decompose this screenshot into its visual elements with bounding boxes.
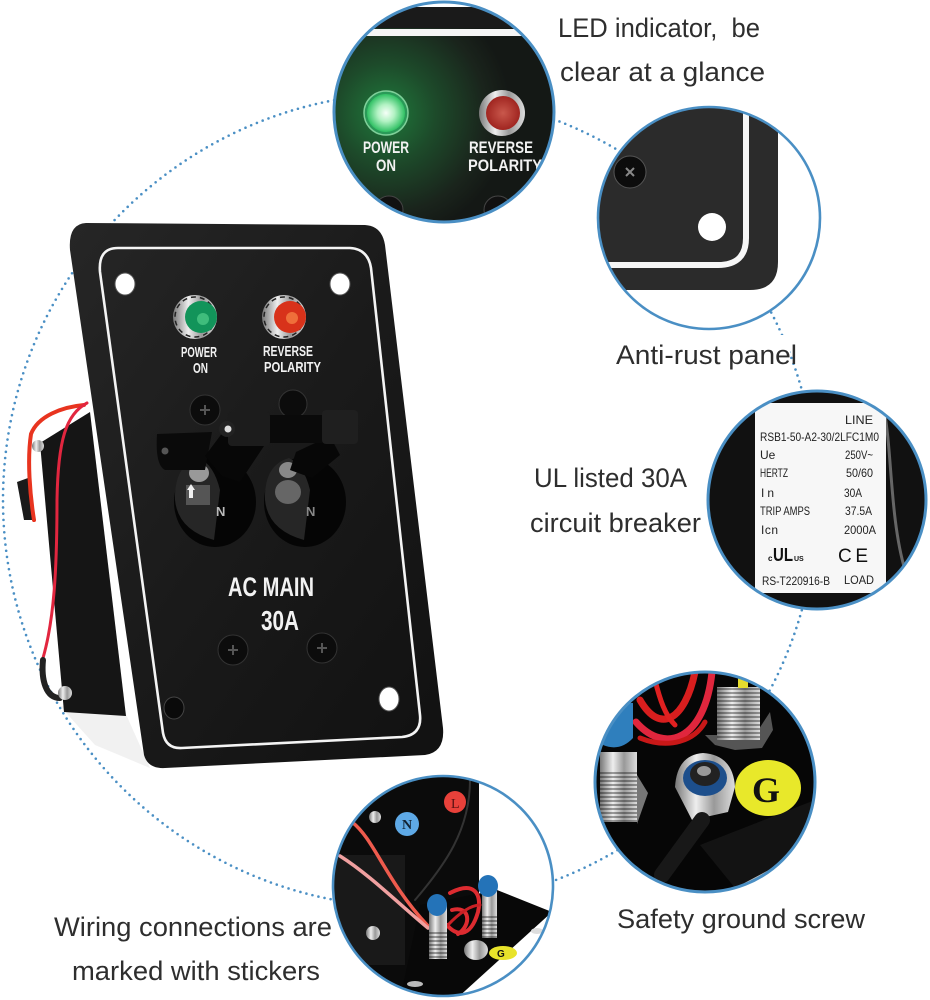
REVERSE POLARITY label: REVERSE [263, 343, 313, 360]
lower screws [380, 196, 404, 212]
breaker switch right [264, 457, 346, 547]
rating text: Icn [761, 523, 778, 537]
dotted ring connecting the callouts [3, 93, 817, 907]
rating text: 50/60 [846, 466, 873, 480]
board edge highlight [742, 870, 768, 884]
label: LED indicator [558, 13, 765, 87]
white inlay border [100, 248, 420, 748]
board [427, 890, 549, 995]
N sticker [395, 812, 419, 836]
breaker switch right: N [306, 504, 315, 519]
ground nut [675, 753, 735, 820]
label: wiring connections: Wiring connections are [54, 912, 332, 942]
label: safety ground screw: Safety ground screw [617, 904, 866, 934]
REVERSE POLARITY label [263, 343, 321, 376]
label: anti-rust panel: Anti-rust panel [616, 340, 797, 370]
panel plate [70, 223, 443, 768]
POWER ON label [181, 344, 217, 377]
yellow G sticker [489, 946, 517, 960]
terminal screw [369, 811, 381, 823]
UL mark: UL [773, 545, 793, 565]
UL mark [768, 548, 804, 561]
plate screws [190, 390, 337, 665]
lower-left screw [366, 926, 380, 940]
ground lead [662, 820, 702, 875]
breaker switch left [174, 457, 256, 547]
rating text: HERTZ [760, 466, 788, 480]
callout: wiring magnifier [330, 770, 560, 1000]
N sticker: N [402, 818, 412, 833]
mounting holes [115, 273, 399, 711]
REVERSE POLARITY text: POLARITY [468, 156, 543, 175]
label: LED indicator: LED indicator, be [558, 13, 760, 43]
dark hole [164, 697, 184, 719]
blue sleeve [603, 703, 633, 747]
AC MAIN 30A text: 30A [261, 605, 299, 636]
LED green [173, 295, 217, 339]
shadow under the panel [60, 706, 150, 768]
yellow G sticker: G [497, 949, 505, 960]
rating text: In [761, 486, 774, 500]
LED post right [478, 875, 498, 938]
ground nut [464, 940, 488, 960]
callout: anti-rust panel magnifier [590, 100, 830, 330]
white inlay [608, 114, 749, 268]
yellow G sticker [735, 760, 801, 816]
rating text: 30A [844, 486, 862, 500]
AC MAIN 30A text [228, 572, 314, 636]
POWER ON label: POWER [181, 344, 217, 361]
rating text: RSB1-50-A2-30/2LFC1M0 [760, 430, 879, 444]
REVERSE POLARITY text [468, 142, 542, 171]
breaker switch left: N [216, 504, 225, 519]
rating text [760, 413, 879, 588]
hole [698, 213, 726, 241]
rating text: Ue [760, 448, 776, 462]
REVERSE POLARITY label: POLARITY [264, 359, 321, 376]
red wires [636, 672, 712, 743]
LED post left [427, 894, 447, 959]
callout: LED indicator magnifier [330, 0, 560, 230]
rating text: 2000A [844, 523, 876, 537]
rating text: 250V~ [845, 448, 873, 462]
rear breaker box [40, 412, 126, 716]
rating text: 37.5A [845, 504, 872, 518]
label backgrounds [50, 335, 790, 995]
AC MAIN 30A text: AC MAIN [228, 572, 314, 602]
threaded post left [600, 752, 648, 824]
board holes [531, 928, 543, 934]
L sticker [444, 791, 466, 813]
lockout handle [157, 410, 358, 482]
UL mark: c [768, 554, 773, 563]
LED red [262, 295, 306, 339]
POWER ON text: ON [376, 156, 396, 175]
POWER ON label: ON [193, 360, 208, 377]
rear upper screw [32, 440, 44, 452]
lit green LED [364, 91, 408, 135]
wires [340, 780, 480, 934]
board gloss [700, 800, 815, 888]
label: wiring connections: marked with stickers [72, 956, 320, 986]
label: UL listed breaker: circuit breaker [530, 508, 701, 538]
yellow G sticker: G [752, 770, 780, 810]
rear terminal screw [58, 686, 72, 700]
rating text: LOAD [844, 573, 874, 587]
plate corner [590, 100, 778, 290]
red LED [479, 90, 525, 136]
white rating sticker [755, 403, 886, 593]
label: wiring connections [54, 912, 332, 986]
red wires [29, 403, 87, 698]
POWER ON text [364, 142, 409, 171]
screw [614, 156, 646, 188]
UL mark: US [794, 556, 804, 563]
threaded post top [705, 674, 773, 750]
L sticker: L [451, 797, 460, 812]
wire clip [17, 478, 33, 520]
product: switch panel [17, 223, 443, 768]
callout: circuit breaker label magnifier [700, 385, 930, 615]
CE mark: CE [838, 546, 868, 567]
label: UL listed breaker [530, 463, 701, 538]
rating text: TRIP AMPS [760, 504, 810, 518]
label: UL listed breaker: UL listed 30A [534, 463, 687, 493]
callout: ground screw magnifier [590, 665, 825, 900]
breaker bodies [338, 777, 479, 987]
POWER ON text: POWER [363, 138, 409, 157]
panel stripe [366, 29, 522, 36]
REVERSE POLARITY text: REVERSE [469, 138, 533, 157]
label: LED indicator: clear at a glance [560, 57, 765, 87]
rating text: RS-T220916-B [762, 574, 830, 588]
rating text: LINE [845, 413, 873, 427]
wire highlight [886, 418, 904, 566]
